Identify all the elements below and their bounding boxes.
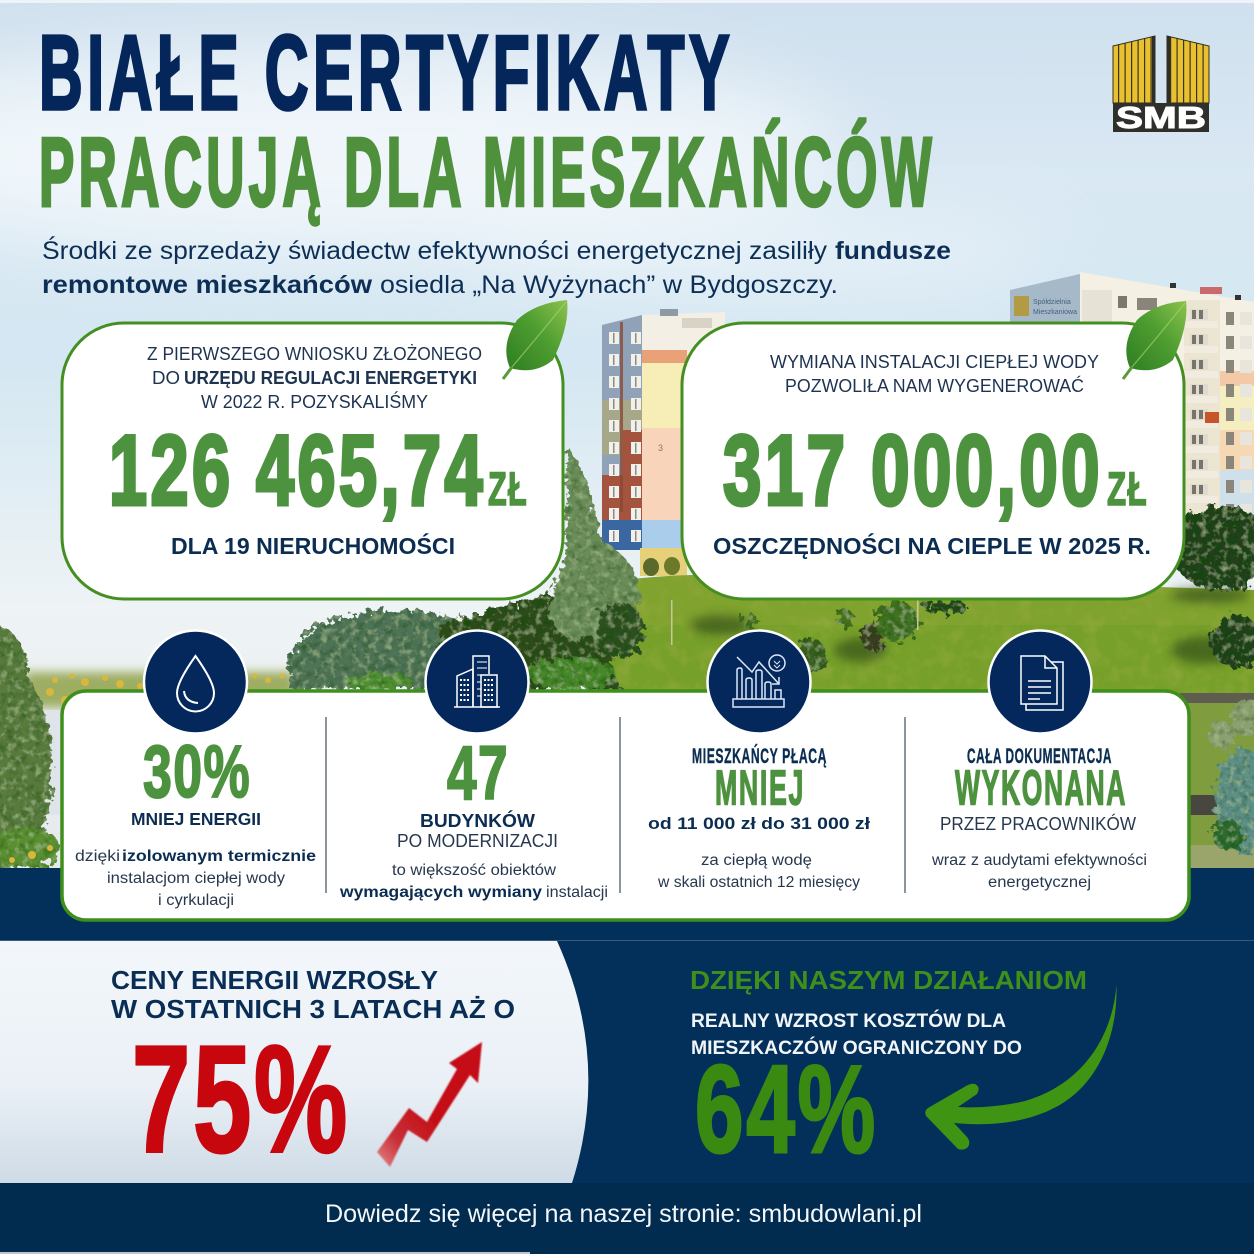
panel: 317 000,00 zł: WYMIANA INSTALACJI CIEPŁEJ WODY — [770, 352, 1099, 372]
statistic: residents pay less: w skali ostatnich 12 miesięcy — [657, 874, 860, 891]
statistic: 47 buildings: instalacji — [546, 884, 608, 901]
panel: 317 000,00 zł: 317 000,00 — [723, 414, 1103, 526]
statistic: documentation done — [931, 745, 1147, 891]
left tower block: 3 — [658, 443, 663, 453]
panel: 317 000,00 zł: ZŁ — [1107, 462, 1148, 515]
left tower block — [602, 309, 725, 576]
statistic: 47 buildings — [339, 731, 608, 901]
statistic: residents pay less: MNIEJ — [715, 762, 805, 816]
panel: energy prices rose — [0, 941, 588, 1184]
statistic: residents pay less: od 11 000 zł do 31 000 zł — [648, 814, 870, 833]
panel: four statistics — [62, 691, 1189, 920]
panel: 126 465,74 zł: W 2022 R. POZYSKALIŚMY — [201, 391, 428, 412]
far right lawn, path and spruce — [1180, 693, 1254, 868]
intro text: fundusze — [835, 237, 951, 265]
panel: thanks to our actions: MIESZKACZÓW OGRANICZONY DO — [691, 1037, 1022, 1059]
panel: 126 465,74 zł: DLA 19 NIERUCHOMOŚCI — [171, 532, 455, 559]
panel: 126 465,74 zł: 126 465,74 — [109, 414, 486, 526]
panel: 126 465,74 zł — [62, 323, 563, 599]
logo: SMB: SMB — [1116, 100, 1206, 135]
statistic: documentation done: energetycznej — [988, 874, 1091, 891]
background scene: sky, buildings and greenery — [0, 0, 1254, 870]
panel: energy prices rose: 75% — [132, 1014, 350, 1184]
footer: Dowiedz się więcej na naszej stronie: smbudowlani.pl — [325, 1200, 922, 1228]
panel: thanks to our actions: 64% — [695, 1041, 878, 1179]
icon: red rising arrow — [377, 1042, 482, 1167]
statistic: 30% less energy: 30% — [143, 730, 251, 813]
green hill — [590, 574, 1254, 870]
logo: SMB — [1113, 36, 1209, 135]
right apartment block: Mieszkaniowa — [1033, 309, 1077, 316]
statistic: documentation done: CAŁA DOKUMENTACJA — [967, 745, 1112, 768]
statistic: 47 buildings: PO MODERNIZACJI — [397, 831, 558, 851]
intro text: Środki ze sprzedaży świadectw efektywności energetycznej zasiliły — [42, 235, 828, 265]
panel: thanks to our actions: DZIĘKI NASZYM DZIAŁANIOM — [690, 965, 1087, 995]
right apartment block: Spółdzielnia — [1033, 299, 1071, 306]
footer — [0, 1183, 1254, 1254]
panel: energy prices rose: W OSTATNICH 3 LATACH AŻ O — [111, 994, 515, 1024]
statistic: 47 buildings: 47 — [447, 731, 509, 816]
panel: energy prices rose: CENY ENERGII WZROSŁY — [111, 965, 438, 995]
intro text: remontowe mieszkańców — [42, 271, 373, 299]
statistic: 47 buildings: BUDYNKÓW — [420, 810, 536, 831]
panel: thanks to our actions — [0, 940, 1254, 1183]
intro text: osiedla „Na Wyżynach” w Bydgoszczy. — [380, 271, 838, 299]
shrub shadows on the lawn — [690, 587, 1250, 670]
panel: 126 465,74 zł: Z PIERWSZEGO WNIOSKU ZŁOŻONEGO — [147, 344, 482, 364]
panel: 126 465,74 zł: DO — [152, 368, 180, 388]
navy band behind statistics — [0, 868, 1254, 940]
panel: 317 000,00 zł — [682, 323, 1184, 599]
statistic: 30% less energy: instalacjom ciepłej wody — [107, 870, 285, 887]
statistic: 30% less energy: izolowanym termicznie — [122, 848, 316, 865]
icon: documents — [988, 630, 1092, 734]
icon: falling bar chart — [708, 630, 810, 734]
intro text — [42, 235, 951, 299]
icon: buildings — [426, 630, 528, 734]
panel: 126 465,74 zł: ZŁ — [488, 462, 528, 515]
icon: water drop — [144, 630, 247, 734]
statistic: residents pay less — [648, 745, 870, 891]
icon: leaf left — [503, 300, 567, 379]
statistic: 30% less energy: i cyrkulacji — [158, 892, 234, 909]
statistic: 47 buildings: wymagających wymiany — [339, 884, 542, 901]
statistic: 30% less energy: MNIEJ ENERGII — [131, 809, 261, 829]
statistic: residents pay less: MIESZKAŃCY PŁACĄ — [692, 745, 827, 768]
right apartment block — [1010, 272, 1254, 530]
panel: 317 000,00 zł: OSZCZĘDNOŚCI NA CIEPLE W 2025 R. — [713, 532, 1151, 559]
statistic: 47 buildings: to większość obiektów — [392, 862, 557, 879]
statistic: 30% less energy — [75, 730, 316, 909]
panel: thanks to our actions: REALNY WZROST KOSZTÓW DLA — [691, 1010, 1006, 1032]
statistic: 30% less energy: dzięki — [75, 848, 120, 865]
icon: leaf right — [1123, 301, 1186, 379]
title: BIAŁE CERTYFIKATY — [39, 14, 734, 132]
statistic: documentation done: wraz z audytami efektywności — [931, 852, 1147, 869]
icon: green curved arrow — [925, 985, 1117, 1150]
statistic: documentation done: PRZEZ PRACOWNIKÓW — [940, 813, 1136, 834]
title — [39, 14, 936, 226]
panel: 317 000,00 zł: POZWOLIŁA NAM WYGENEROWAĆ — [785, 375, 1084, 396]
statistic: residents pay less: za ciepłą wodę — [701, 852, 812, 869]
left meadow with yellow flowers — [25, 672, 295, 815]
panel: 126 465,74 zł: URZĘDU REGULACJI ENERGETYKI — [184, 368, 477, 388]
trees and bushes — [0, 445, 1254, 868]
